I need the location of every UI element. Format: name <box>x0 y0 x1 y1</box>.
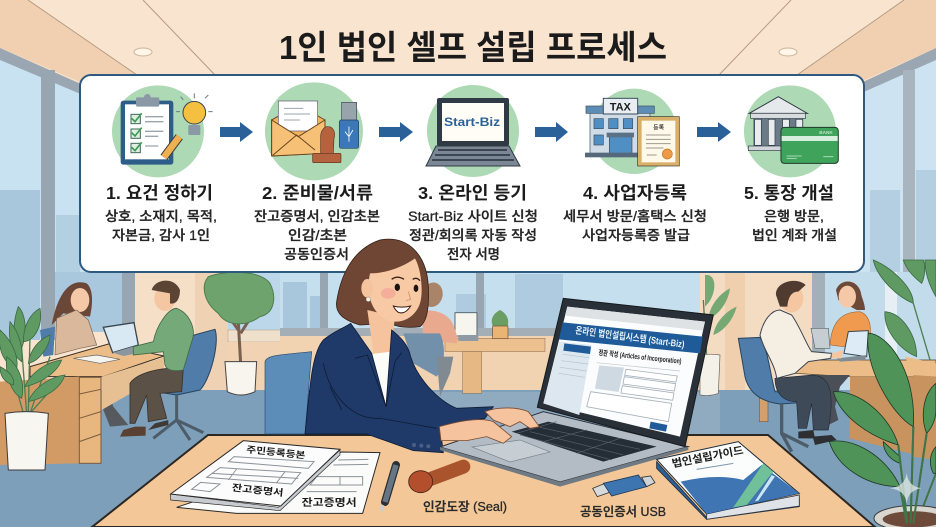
guide book <box>657 442 799 519</box>
tree and pot <box>204 272 274 395</box>
step 4 text: 사업자등록증 발급 <box>582 228 690 243</box>
icon: tax office and certificate: 등록 <box>653 124 665 131</box>
back plant <box>700 275 737 396</box>
seated man <box>760 281 843 445</box>
arrow 3 <box>535 122 568 142</box>
laptop <box>103 323 147 356</box>
step 1 text <box>105 183 217 243</box>
blue office chair <box>145 329 216 440</box>
step 5 text: 5. 통장 개설 <box>744 183 834 203</box>
face <box>369 258 422 322</box>
back office desk and plant <box>403 283 545 397</box>
step 2 text: 2. 준비물/서류 <box>262 183 373 203</box>
laptop screen bezel <box>537 298 713 447</box>
foreground desk <box>92 435 875 527</box>
icon: Start-Biz laptop: Start-Biz <box>444 117 500 129</box>
icon: bank and card <box>744 85 838 177</box>
step 1 text: 상호, 소재지, 목적, <box>105 209 217 224</box>
browser header <box>559 322 703 353</box>
icon: Start-Biz laptop <box>426 85 520 177</box>
seated woman <box>40 282 128 427</box>
step 5 text: 은행 방문, <box>764 209 824 224</box>
upper leaves <box>873 260 936 357</box>
laptop: Start-Biz screen <box>440 298 713 487</box>
title: 1인 법인 셀프 설립 프로세스 <box>279 30 667 67</box>
icon: USB drive <box>593 475 655 497</box>
large leaves and pot <box>898 427 936 523</box>
step 1 text: 자본금, 감사 1인 <box>112 228 210 243</box>
panel: five-step process <box>80 75 864 272</box>
step 2 text: 공동인증서 <box>284 247 349 262</box>
icon: tax office and certificate: TAX <box>610 102 632 114</box>
icon: seal stamp <box>409 467 463 493</box>
step 2 text: 인감/초본 <box>288 228 347 243</box>
form title: 정관 작성 (Articles of Incorporation) <box>598 348 682 366</box>
step 3 text: Start-Biz 사이트 신청 <box>408 209 538 224</box>
step 3 text <box>408 183 538 262</box>
icon: tax office and certificate <box>585 89 679 174</box>
navy blazer <box>305 323 493 453</box>
step 3 text: 정관/회의록 자동 작성 <box>409 228 537 243</box>
guide book: 법인설립가이드 <box>671 444 745 470</box>
side desk over plant <box>905 357 936 377</box>
step 4 text: 세무서 방문/홈택스 신청 <box>563 208 707 224</box>
icon: envelope, stamp and USB <box>265 82 363 180</box>
sparkle mark <box>890 473 922 503</box>
arrow 2 <box>379 122 413 142</box>
documents <box>171 441 380 513</box>
step 5 text <box>744 183 837 243</box>
laptop base <box>440 412 688 482</box>
left coworkers at desk <box>0 272 274 470</box>
arrow 4 <box>697 122 731 142</box>
plant and white pot <box>0 307 65 470</box>
label: USB: 공동인증서 USB <box>580 505 666 519</box>
documents: 주민등록등본 <box>246 444 306 461</box>
seated man <box>120 281 193 437</box>
hands on keyboard <box>439 408 539 443</box>
icon: bank and card: BANK <box>819 130 833 135</box>
documents: 잔고증명서 <box>231 482 284 498</box>
step 4 text <box>563 183 707 243</box>
form fields <box>595 365 624 392</box>
hair <box>336 239 429 327</box>
neck <box>367 310 395 356</box>
label: seal: 인감도장 (Seal) <box>423 500 507 514</box>
desk <box>759 360 936 460</box>
step 5 text: 법인 계좌 개설 <box>752 228 837 243</box>
submit button <box>649 422 667 432</box>
step 2 text: 잔고증명서, 인감초본 <box>254 209 380 224</box>
desk <box>0 344 164 465</box>
step 2 text <box>254 183 380 262</box>
chair <box>265 352 312 434</box>
woman at desk <box>265 239 493 453</box>
white blouse <box>372 352 391 407</box>
foreground plant <box>829 260 936 527</box>
blue office chair <box>738 337 815 452</box>
sidebar <box>543 342 592 415</box>
step 3 text: 전자 서명 <box>447 247 500 262</box>
laptop: Start-Biz screen: 온라인 법인설립시스템 (Start-Biz) <box>575 324 685 351</box>
step 1 text: 1. 요건 정하기 <box>106 183 213 203</box>
step 4 text: 4. 사업자등록 <box>583 183 687 203</box>
icon: checklist and light bulb <box>112 85 213 177</box>
documents: 잔고증명서 <box>302 496 357 509</box>
icon: pen <box>381 465 396 511</box>
step 3 text: 3. 온라인 등기 <box>418 183 527 203</box>
seated woman <box>811 281 871 425</box>
arrow 1 <box>220 122 253 142</box>
right coworkers at desk <box>700 275 936 460</box>
